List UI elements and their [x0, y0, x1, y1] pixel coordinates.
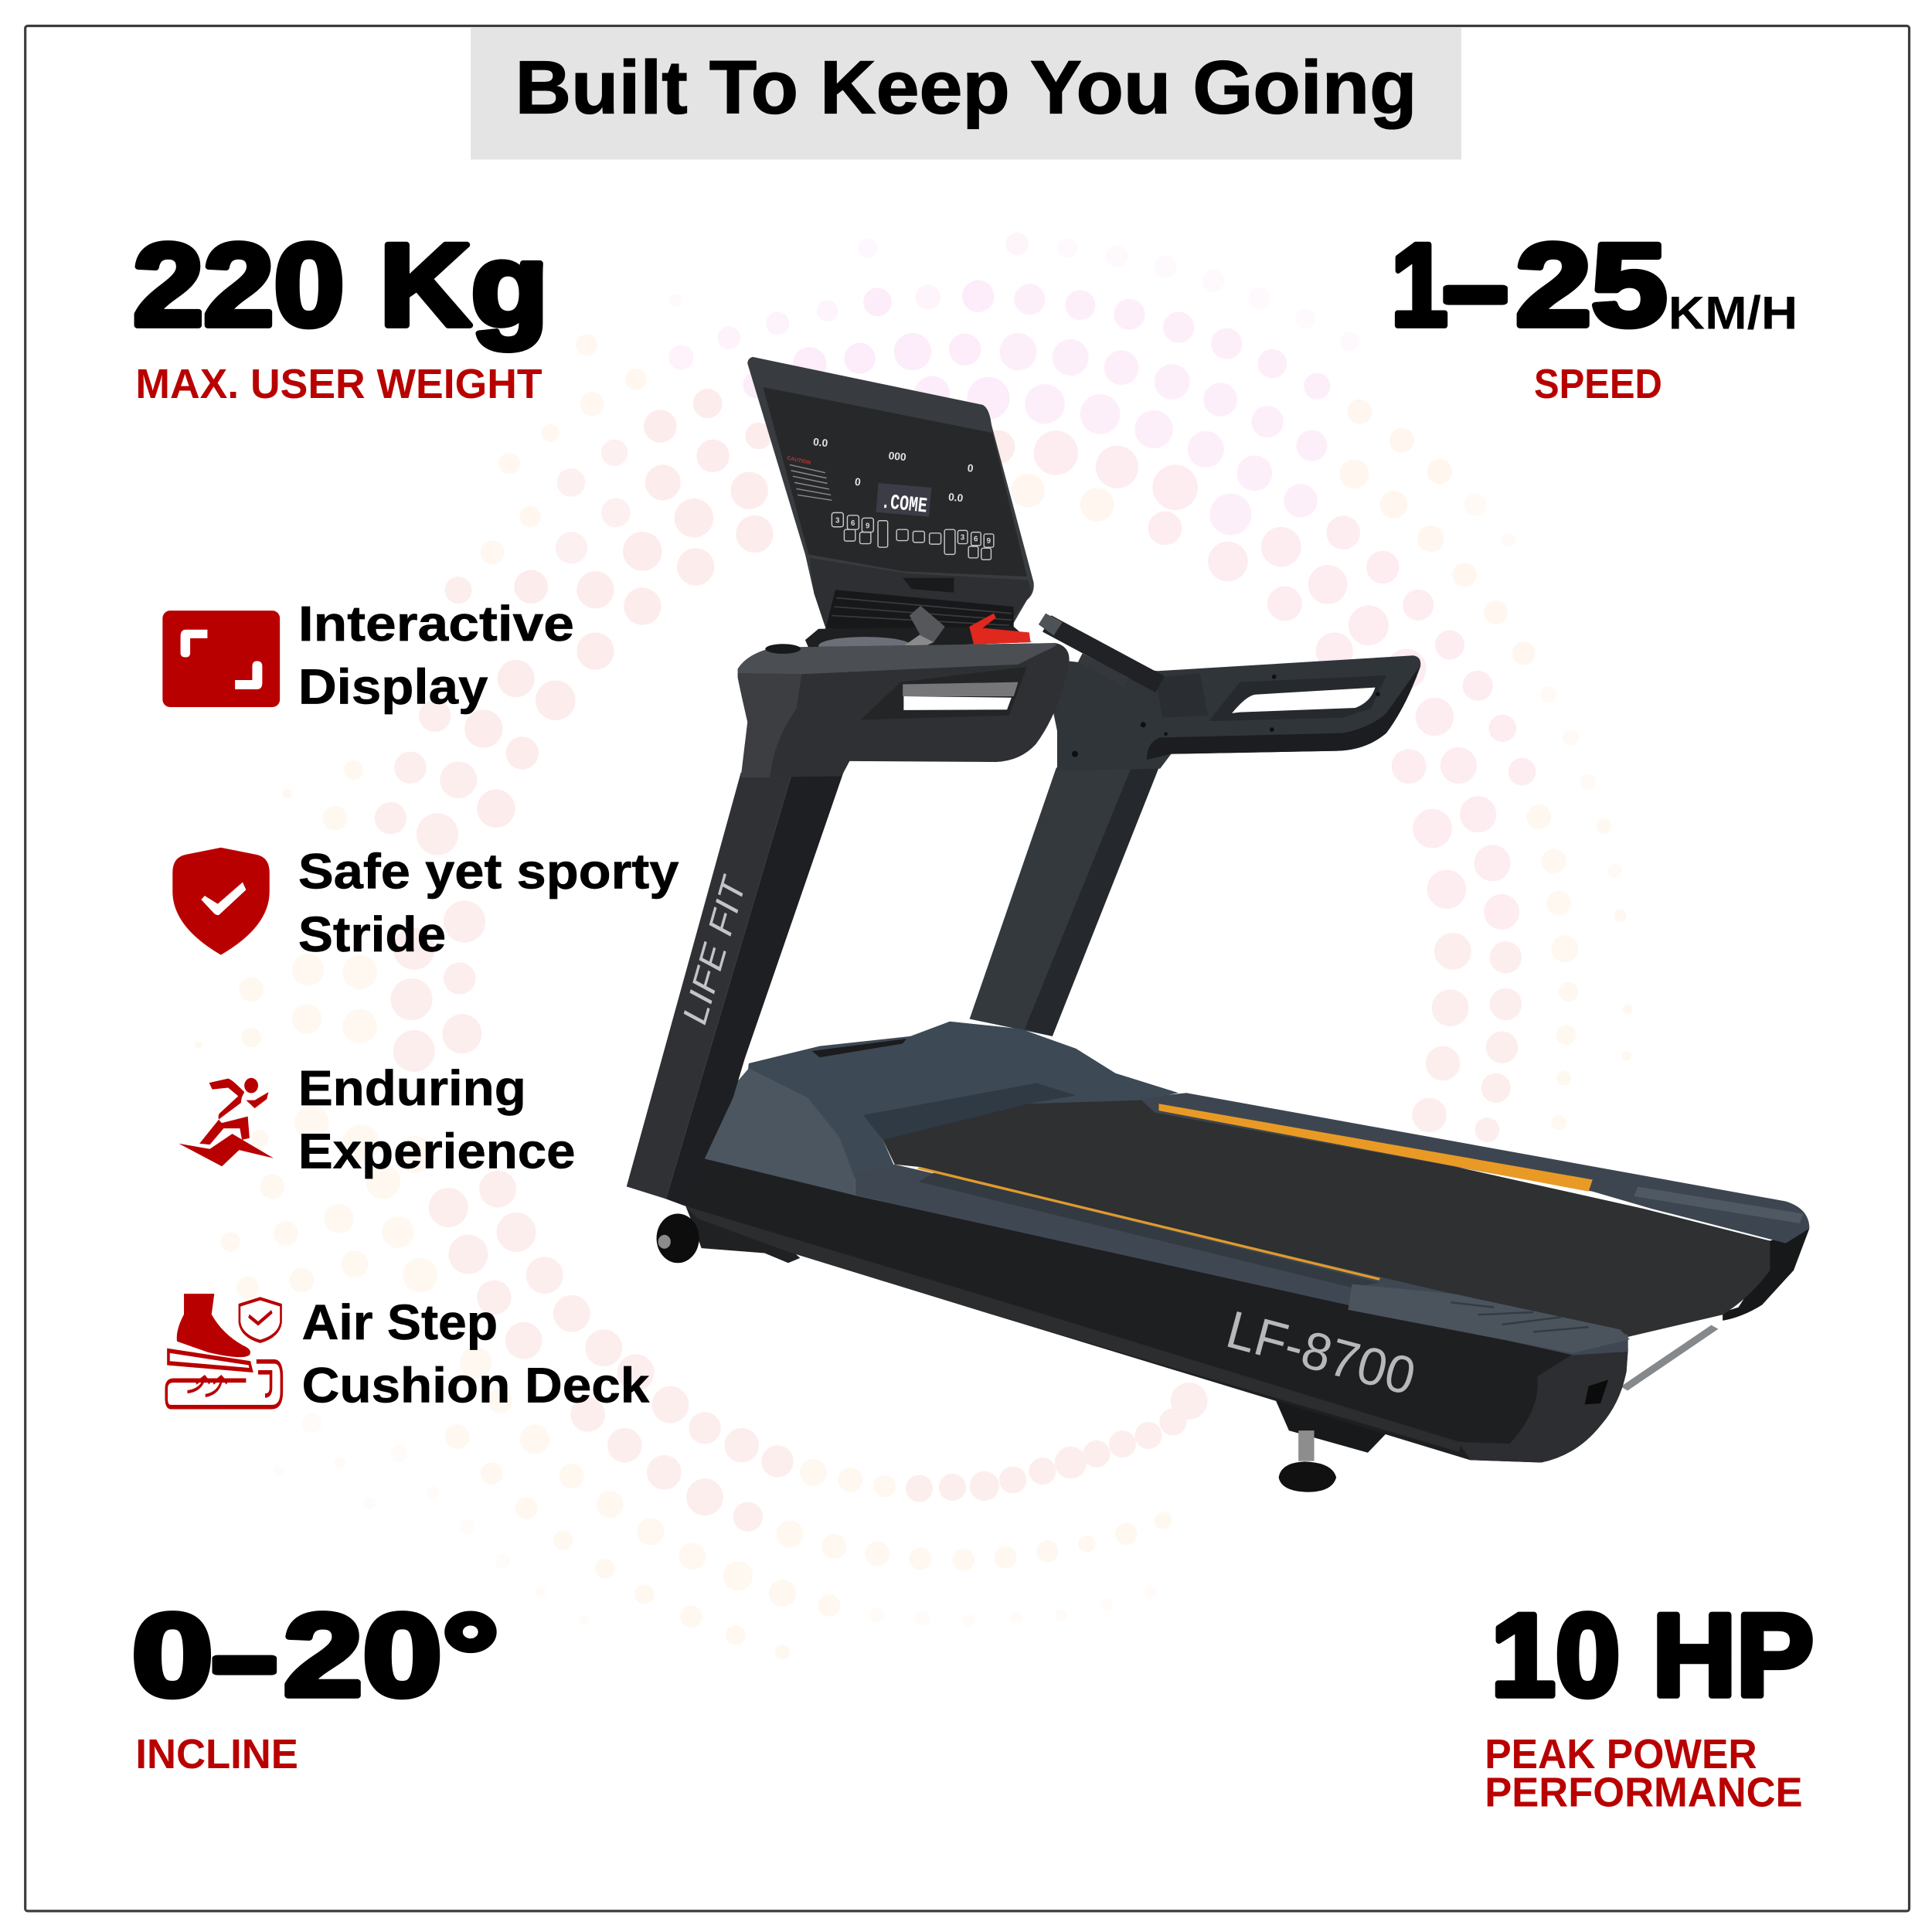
hood recess: [863, 1083, 1076, 1140]
feature text: interactive display: [298, 596, 574, 714]
feature text: air step cushion deck: [302, 1294, 650, 1413]
stat: incline: [132, 1590, 499, 1777]
model label LF-8700: LF-8700: [1220, 1299, 1422, 1406]
feature text: safe stride: Safe yet sporty: [298, 844, 679, 900]
hood: [698, 1022, 1179, 1196]
treadmill deck: [657, 1022, 1809, 1492]
feature list: [162, 596, 679, 1413]
feature text: enduring experience: Experience: [298, 1123, 576, 1179]
far side rail with orange strip: [1139, 1093, 1809, 1243]
title banner: [471, 27, 1461, 159]
stat: peak power: [1485, 1590, 1814, 1815]
stat: max user weight: [133, 220, 549, 407]
stat: max user weight: MAX. USER WEIGHT: [135, 361, 543, 407]
left upright post: [627, 773, 843, 1206]
stat: incline: -: [209, 1590, 280, 1721]
stat: max user weight: 220 Kg: [133, 220, 549, 351]
post brand LIFE FIT: LIFE FIT: [676, 871, 754, 1029]
treadmill product illustration: [627, 357, 1809, 1492]
right handrail arm: [1039, 614, 1420, 770]
rear roller and hook: [1624, 1229, 1809, 1389]
feature text: air step cushion deck: Air Step: [302, 1294, 498, 1350]
feature text: enduring experience: Enduring: [298, 1060, 526, 1116]
treadmill console: 6: [974, 536, 978, 544]
stat: speed: 1: [1391, 220, 1447, 351]
hood light wedge: [698, 1068, 855, 1196]
deck side panel: [685, 1155, 1628, 1463]
dotted radial background pattern: [195, 233, 1633, 1660]
feature text: safe stride: [298, 844, 679, 962]
treadmill console: 9: [987, 537, 992, 546]
icon: air step cushion deck: [166, 1294, 281, 1407]
treadmill console: 9: [866, 522, 870, 530]
title banner: Built To Keep You Going: [515, 46, 1417, 130]
stat: peak power: 10 HP: [1491, 1590, 1814, 1721]
stat: speed: 25: [1515, 220, 1667, 351]
stat: speed: KM/H: [1668, 287, 1798, 339]
running belt: [883, 1098, 1770, 1337]
stat: incline: INCLINE: [135, 1731, 298, 1777]
treadmill console: 0: [967, 462, 975, 474]
treadmill console: 6: [851, 519, 855, 528]
stat: peak power: PEAK POWER: [1485, 1731, 1757, 1777]
stat: speed: SPEED: [1534, 361, 1662, 407]
treadmill console: 000: [888, 450, 907, 463]
icon: interactive display: [162, 611, 280, 707]
treadmill console: [747, 357, 1034, 629]
feature text: interactive display: Interactive: [298, 596, 574, 651]
wheel: [657, 1206, 800, 1263]
feature text: air step cushion deck: Cushion Deck: [302, 1357, 650, 1413]
adjustable foot: [1273, 1395, 1392, 1492]
icon: safety shield: [172, 848, 270, 955]
near side rail with orange strip: [855, 1165, 1630, 1355]
icon: runner: [179, 1078, 274, 1166]
feature text: safe stride: Stride: [298, 906, 446, 962]
stat: incline: 20°: [284, 1590, 499, 1721]
right upright post: [970, 767, 1159, 1036]
treadmill console: .COME: [880, 491, 928, 519]
left handlebar with tray and safety key: [738, 606, 1070, 777]
stat: speed: -: [1440, 220, 1511, 351]
treadmill console: 0: [854, 476, 862, 488]
treadmill console: 3: [961, 533, 965, 542]
feature text: enduring experience: [298, 1060, 576, 1179]
stat: peak power: PERFORMANCE: [1485, 1769, 1803, 1815]
console logo plate: [812, 1039, 906, 1057]
stat: speed: [1391, 220, 1798, 407]
treadmill console: CAUTION: [786, 456, 811, 466]
treadmill console: 0.0: [812, 436, 828, 449]
treadmill console: 3: [835, 517, 840, 526]
stat: incline: 0: [132, 1590, 213, 1721]
feature text: interactive display: Display: [298, 658, 488, 714]
treadmill console: 0.0: [947, 491, 964, 504]
